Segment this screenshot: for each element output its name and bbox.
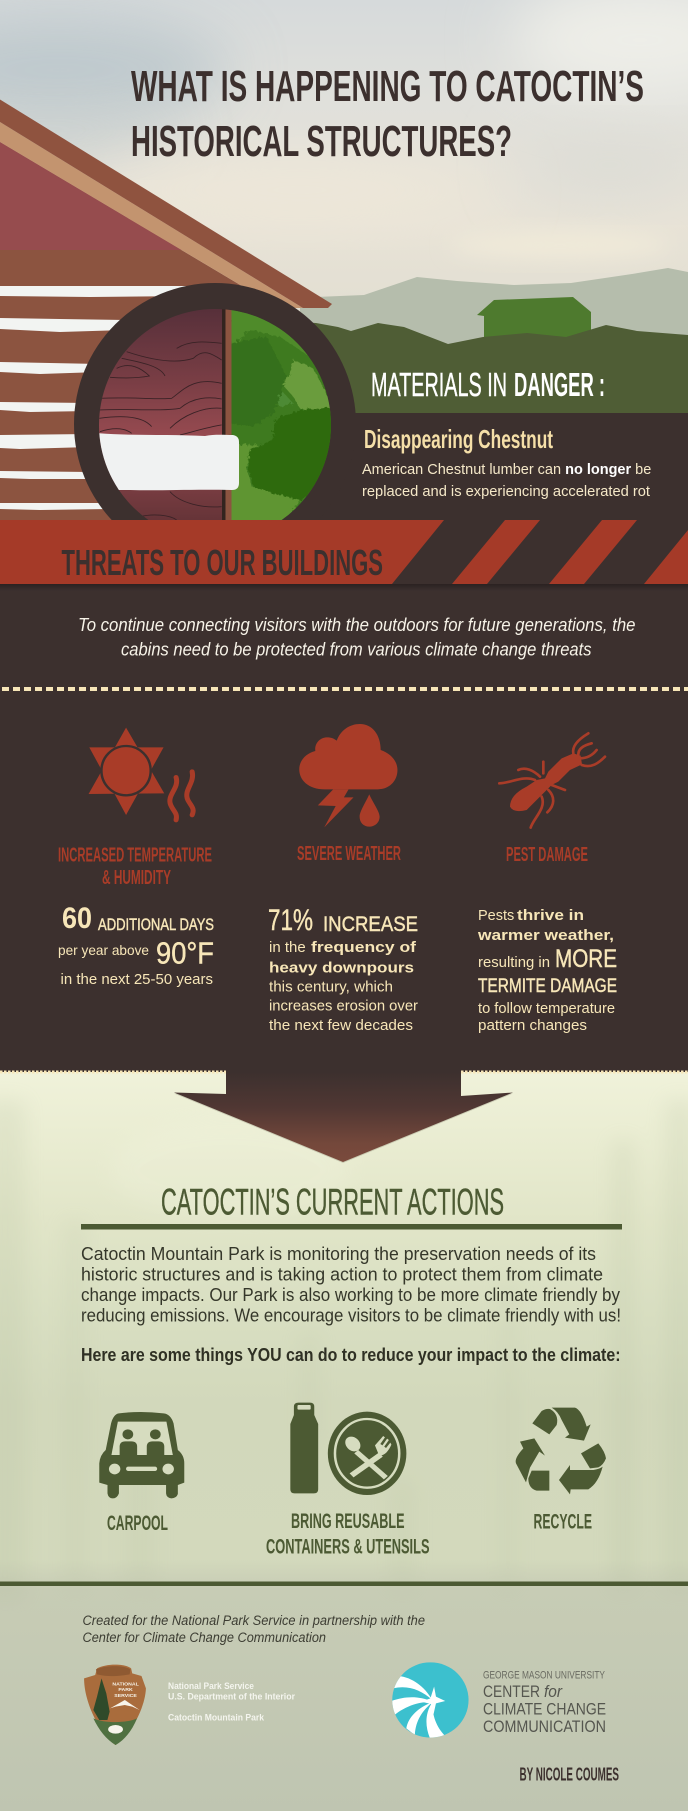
center for climate change text: CENTER bbox=[483, 1682, 540, 1701]
credit statement bbox=[82, 1613, 425, 1645]
distant mountains bbox=[300, 268, 688, 345]
intro statement: To continue connecting visitors with the outdoors for future generations, the bbox=[78, 614, 636, 635]
hazard stripes bbox=[452, 520, 540, 584]
actions paragraph: reducing emissions. We encourage visitors to be climate friendly with us! bbox=[81, 1306, 621, 1326]
arrow pointing to actions bbox=[174, 1072, 513, 1163]
icon: plate with spoon and fork bbox=[328, 1412, 406, 1495]
logo: national park service arrowhead: SERVICE bbox=[114, 1693, 138, 1699]
threat statistics: Pests bbox=[478, 908, 514, 924]
threat statistics bbox=[477, 907, 617, 1034]
arrow shape bbox=[174, 1072, 513, 1162]
threat statistics: 71% bbox=[268, 904, 313, 937]
threat statistics: warmer weather, bbox=[477, 927, 614, 944]
threat statistics: pattern changes bbox=[478, 1018, 587, 1034]
logo: center for climate change communication bbox=[390, 1662, 469, 1739]
threat statistics: resulting in bbox=[478, 955, 550, 971]
actions paragraph: change impacts. Our Park is also working to be more climate friendly by bbox=[81, 1285, 620, 1305]
banner heading: THREATS TO OUR BUILDINGS bbox=[62, 542, 383, 583]
materials text: disappearing chestnut bbox=[362, 424, 651, 500]
national park service text: U.S. Department of the Interior bbox=[168, 1692, 295, 1702]
action labels: BRING REUSABLE bbox=[291, 1510, 404, 1533]
forest background for actions section bbox=[0, 1072, 688, 1811]
threat heading bbox=[58, 844, 212, 889]
white plank inside wood bbox=[96, 433, 239, 490]
national park service text: Catoctin Mountain Park bbox=[168, 1712, 265, 1722]
dark panel behind materials text bbox=[290, 413, 688, 523]
threat statistics: frequency of bbox=[311, 939, 417, 956]
logo: national park service arrowhead: NATIONAL bbox=[112, 1682, 139, 1687]
call to action: Here are some things YOU can do to reduce your impact to the climate: bbox=[81, 1345, 620, 1365]
actions paragraph: historic structures and is taking action to protect them from climate bbox=[81, 1264, 603, 1284]
banner shadow bbox=[0, 584, 688, 591]
column 2: severe weather bbox=[268, 843, 418, 1034]
icon: reusable bottle bbox=[290, 1403, 318, 1493]
front green hills bbox=[300, 322, 688, 413]
action labels: RECYCLE bbox=[534, 1510, 592, 1534]
column 1: increased temperature bbox=[58, 844, 214, 988]
cabin wall and roof bbox=[0, 100, 332, 520]
threat statistics: 90°F bbox=[156, 936, 214, 970]
circular magnifier: wood and moss bbox=[74, 283, 356, 520]
threat statistics bbox=[268, 904, 418, 1034]
threat heading: & HUMIDITY bbox=[102, 867, 171, 889]
threat statistics: in the bbox=[269, 939, 306, 956]
roof edge bbox=[0, 100, 332, 308]
icon: recycle symbol bbox=[516, 1408, 606, 1494]
divider post bbox=[222, 305, 232, 525]
center for climate change text: GEORGE MASON UNIVERSITY bbox=[483, 1670, 606, 1682]
heading: title bbox=[131, 62, 644, 166]
center for climate change text: COMMUNICATION bbox=[483, 1717, 606, 1736]
threat statistics: INCREASE bbox=[323, 913, 418, 936]
materials text: disappearing chestnut: American Chestnut lumber can no longer be bbox=[362, 462, 651, 478]
threat statistics: per year above bbox=[58, 942, 149, 958]
arrow shadow bbox=[174, 1075, 513, 1163]
threat statistics: TERMITE DAMAGE bbox=[478, 976, 617, 997]
threat statistics: to follow temperature bbox=[478, 1001, 615, 1017]
national park service text bbox=[168, 1681, 295, 1722]
intro statement bbox=[78, 614, 636, 660]
green cabin silhouette bbox=[477, 297, 591, 345]
icon: carpool car bbox=[99, 1412, 184, 1498]
dark threats section bbox=[0, 520, 688, 1073]
threat statistics: ADDITIONAL DAYS bbox=[98, 915, 214, 934]
national park service text: National Park Service bbox=[168, 1681, 254, 1691]
materials text: disappearing chestnut: Disappearing Chestnut bbox=[364, 424, 553, 454]
credit statement: Created for the National Park Service in partnership with the bbox=[82, 1613, 425, 1628]
threat heading: SEVERE WEATHER bbox=[297, 843, 401, 865]
red banner bbox=[0, 520, 444, 584]
materials text: disappearing chestnut: replaced and is experiencing accelerated rot bbox=[362, 484, 650, 500]
roof fascia bbox=[0, 122, 303, 308]
threat heading: INCREASED TEMPERATURE bbox=[58, 844, 212, 866]
threat statistics: heavy downpours bbox=[269, 960, 414, 976]
heading: materials in danger: DANGER : bbox=[514, 366, 605, 403]
threat heading: PEST DAMAGE bbox=[506, 844, 588, 866]
gable bbox=[0, 142, 182, 250]
moss half bbox=[231, 305, 336, 525]
logo: national park service arrowhead: PARK bbox=[118, 1687, 133, 1693]
center for climate change text bbox=[483, 1670, 606, 1736]
threat statistics: this century, which bbox=[269, 980, 393, 996]
column 3: pest damage bbox=[477, 844, 617, 1034]
intro statement: cabins need to be protected from various climate change threats bbox=[121, 638, 592, 660]
action labels: CARPOOL bbox=[107, 1512, 168, 1535]
credit statement: Center for Climate Change Communication bbox=[82, 1630, 326, 1645]
threat statistics bbox=[58, 902, 214, 988]
heading: materials in danger: MATERIALS IN bbox=[371, 366, 507, 403]
threat statistics: in the next 25-50 years bbox=[60, 972, 213, 988]
action labels bbox=[107, 1510, 592, 1558]
threat statistics: increases erosion over bbox=[269, 998, 418, 1014]
log wall bbox=[0, 142, 290, 520]
wood grain bbox=[99, 342, 222, 520]
action labels: CONTAINERS & UTENSILS bbox=[266, 1536, 430, 1558]
white chinking between logs bbox=[0, 286, 190, 510]
wood half bbox=[95, 305, 225, 525]
actions paragraph bbox=[81, 1244, 621, 1326]
center for climate change text: CLIMATE CHANGE bbox=[483, 1700, 606, 1718]
center for climate change text: for bbox=[544, 1682, 563, 1701]
threat statistics: the next few decades bbox=[269, 1018, 413, 1034]
actions paragraph: Catoctin Mountain Park is monitoring the preservation needs of its bbox=[81, 1244, 596, 1264]
threat statistics: 60 bbox=[62, 902, 92, 935]
threat statistics: thrive in bbox=[517, 907, 584, 924]
logo: national park service arrowhead bbox=[84, 1665, 146, 1745]
sky background bbox=[0, 0, 688, 340]
icon: storm cloud bbox=[299, 724, 397, 827]
magnifier ring bbox=[74, 283, 356, 520]
icon: sun with heat waves bbox=[89, 728, 193, 820]
hazard banner bbox=[0, 520, 688, 591]
threat statistics: MORE bbox=[555, 945, 617, 973]
icon: termite bbox=[499, 733, 605, 828]
